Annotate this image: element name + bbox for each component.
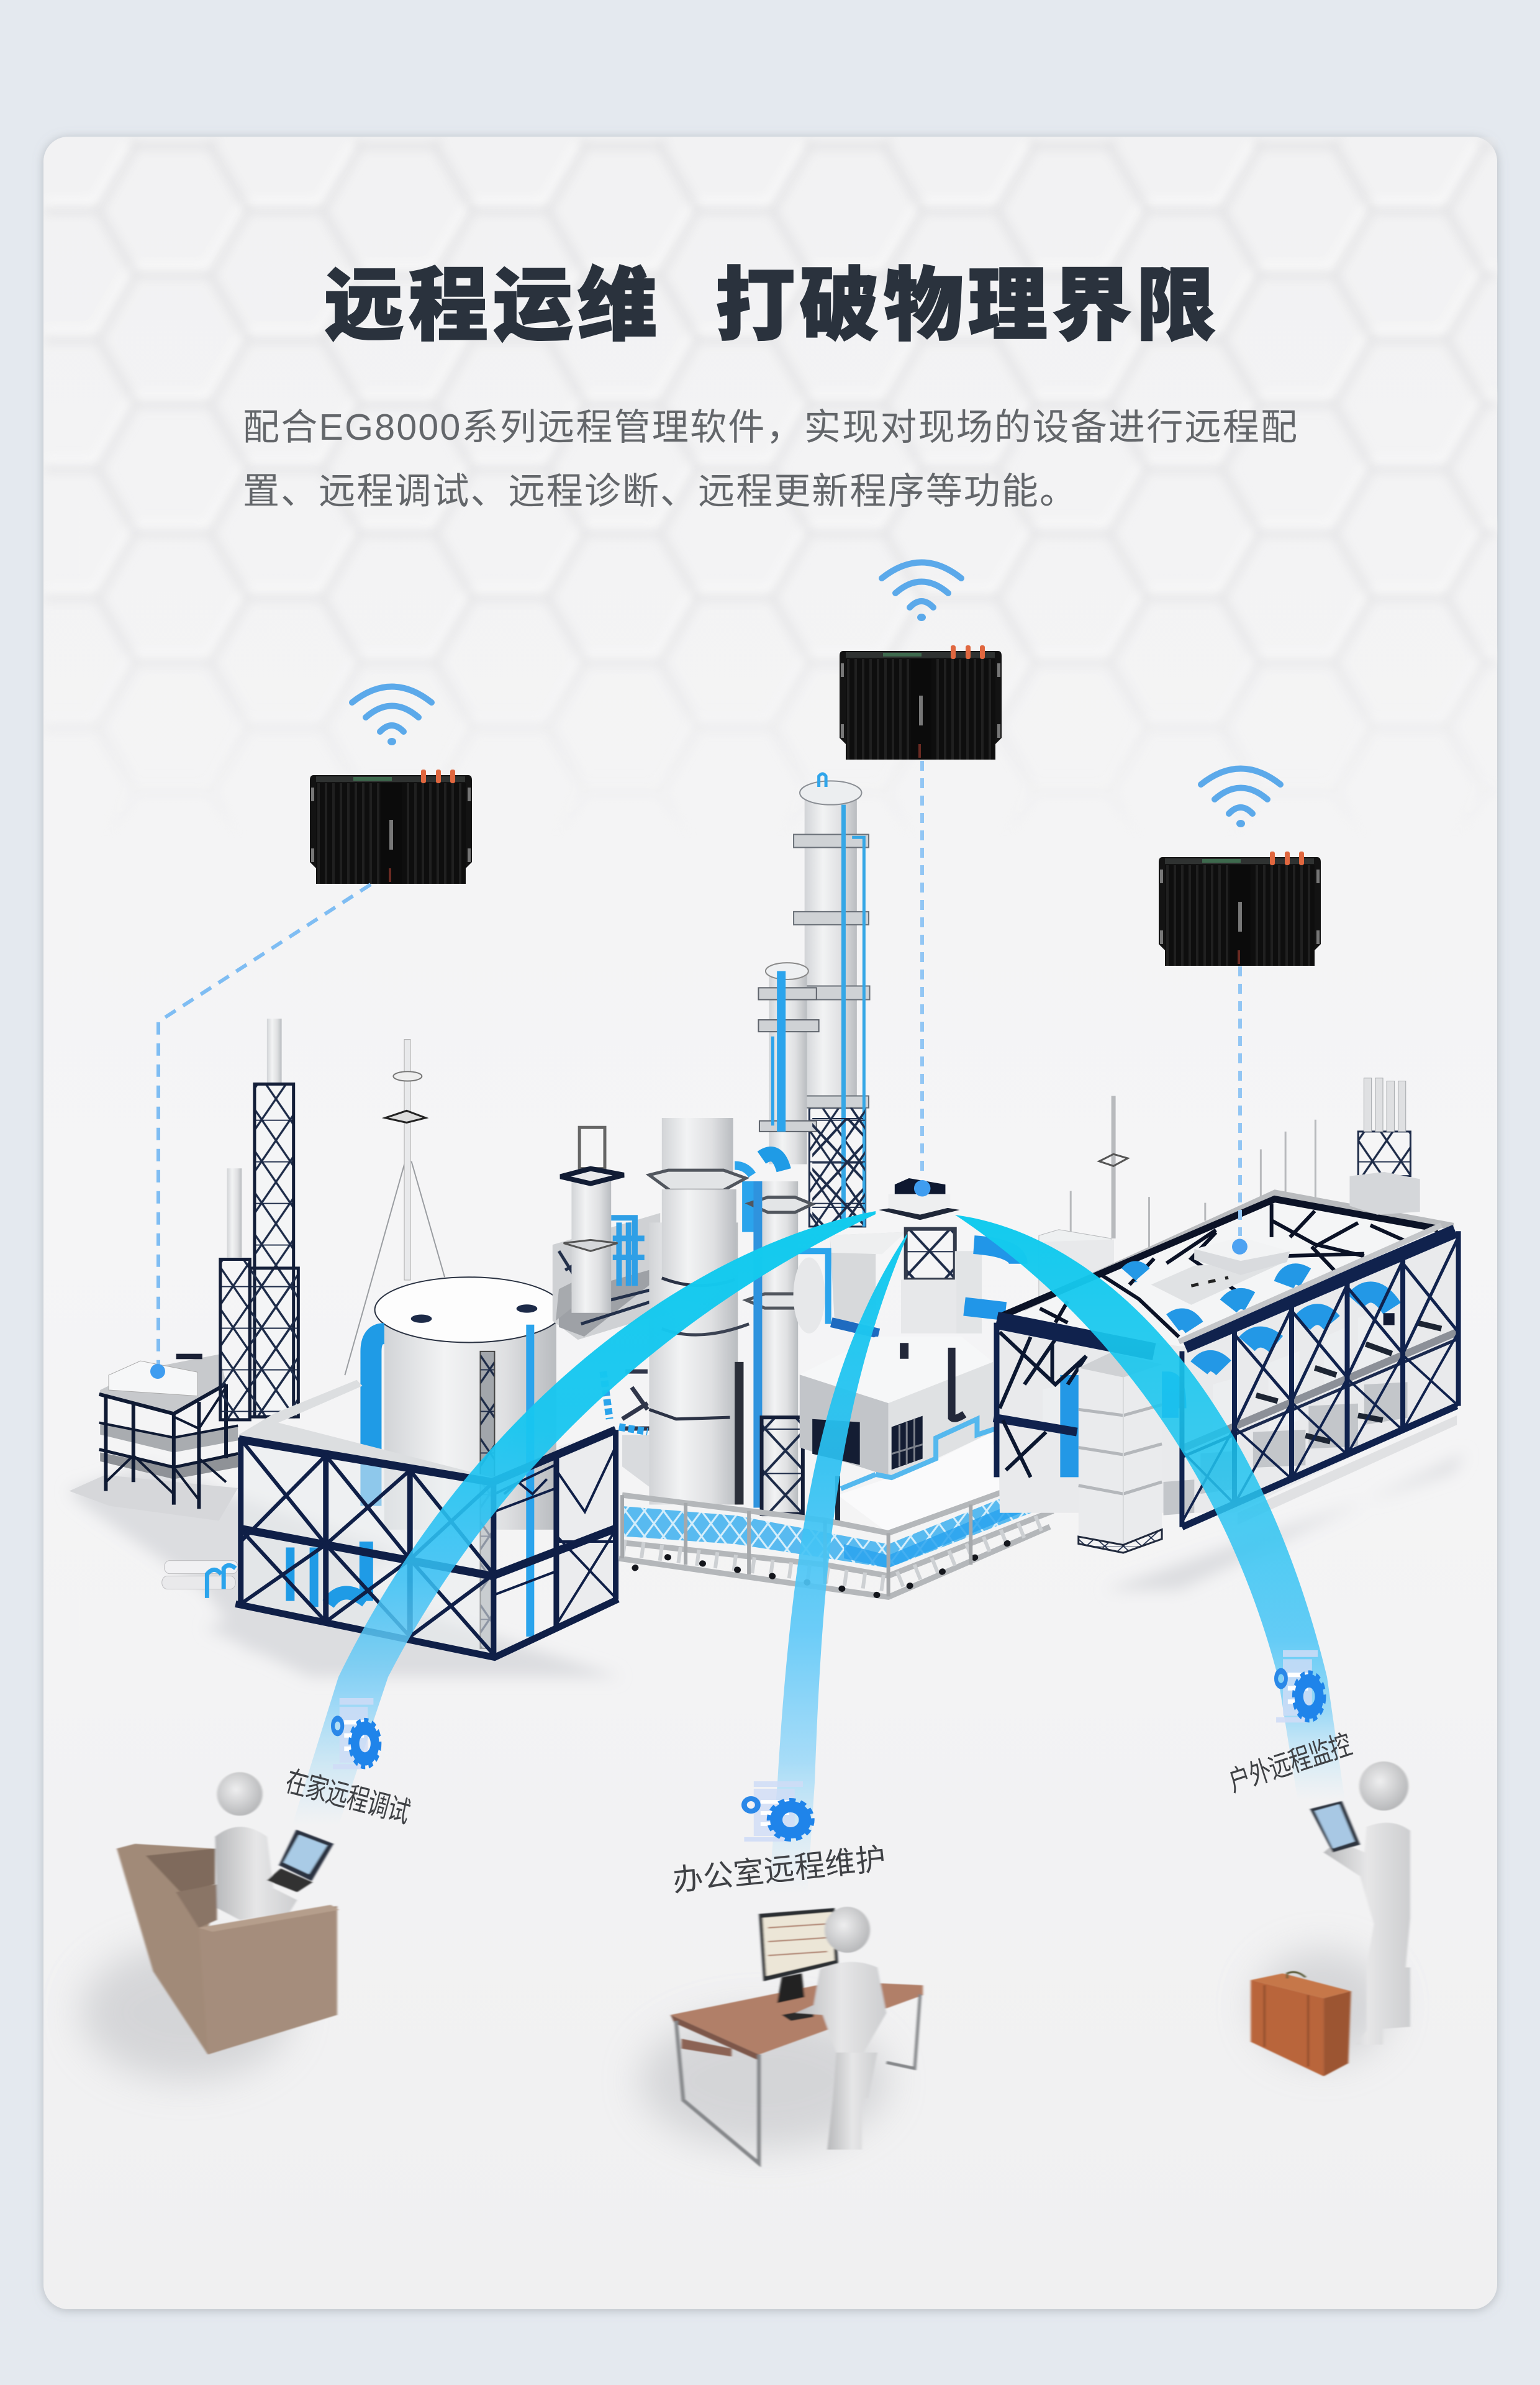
chimney cluster [1349,1078,1420,1215]
icon: home remote tool [333,1698,379,1769]
storage tank [371,1277,563,1648]
back beam [997,1189,1457,1513]
title: 远程运维 [324,261,657,350]
narrow column with blue risers [746,1181,812,1517]
ductwork and cooling unit [794,1178,1018,1333]
person at desk [795,1907,887,2150]
description text [243,407,1297,512]
blue fence [619,1476,1053,1597]
back piping and platforms [553,1118,863,1495]
ground shadows of plant [68,1453,1465,1677]
person with tablet [1324,1761,1410,2045]
icon: outdoor remote tool [1276,1650,1324,1722]
soft ground shadows under people [81,1944,1391,2149]
dashed connector: left gateway to platform [158,884,371,1366]
signal arc: office [769,1233,907,1894]
monitor [759,1908,838,2021]
stacked white ducts [1079,1352,1162,1553]
label: office remote maintenance: 办公室远程维护 [671,1842,887,1898]
description text: 配合EG8000系列远程管理软件，实现对现场的设备进行远程配 [243,407,1297,448]
tall process towers [758,774,870,1227]
scene: home remote debugging [117,1772,339,2055]
laptop [267,1830,333,1892]
lower-left pipes [162,1561,238,1598]
label: outdoor remote monitoring: 户外远程监控 [1225,1728,1356,1798]
base pallets [1238,1415,1457,1525]
device: centre edge gateway with wifi [840,563,1002,760]
label: home remote debugging: 在家远程调试 [282,1764,414,1829]
signal arc: outdoor [955,1215,1345,1801]
armchair [117,1844,339,2055]
small platform [69,1354,238,1520]
tablet [1310,1801,1360,1853]
device: right edge gateway with wifi [1159,769,1321,966]
upper platform and sensor box [1151,1237,1290,1305]
scene: office remote maintenance [671,1907,923,2163]
tanks and blue pipework [1043,1271,1441,1515]
title: 打破物理界限 [715,261,1216,350]
guyed mast [345,1040,445,1375]
person sitting [215,1772,297,1920]
plant: large right steel structure [994,1189,1459,1553]
signal arc: home [292,1211,876,1826]
icon: office remote tool [744,1781,812,1842]
small masts behind right structure [1039,1096,1315,1310]
scene: outdoor remote monitoring [1251,1761,1410,2076]
dashed connector: right gateway to steel structure [1238,966,1242,1236]
suitcase [1251,1972,1351,2076]
plant: navy steel frame [235,1380,618,1658]
desk [671,1981,923,2163]
front and side steelwork [994,1225,1459,1527]
description text: 置、远程调试、远程诊断、远程更新程序等功能。 [243,471,1076,512]
plant: left section [69,1019,563,1648]
chimneys and lattice towers [220,1019,298,1420]
control building [800,1337,1034,1533]
small column [556,1127,624,1321]
plant: central columns, building and fence [553,1118,1053,1597]
wide column [649,1118,749,1504]
title [324,261,1216,350]
device: left edge gateway with wifi [310,687,472,884]
dashed connector: centre gateway to cooling unit [920,761,924,1177]
sensor node: platform [150,1364,165,1379]
